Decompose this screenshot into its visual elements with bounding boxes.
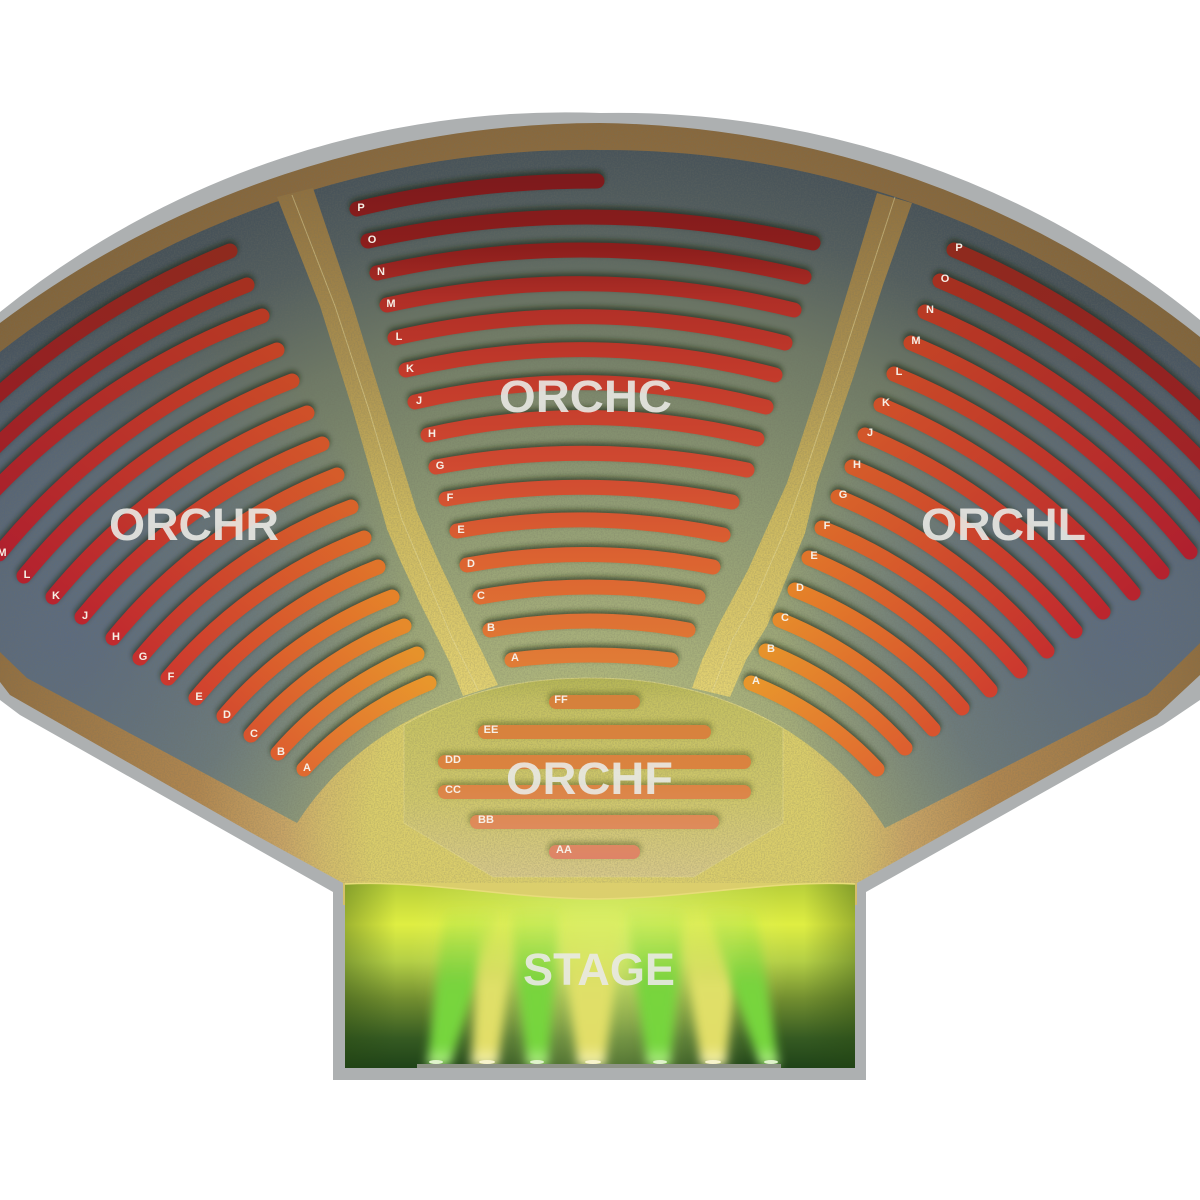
row FF: FF: [554, 694, 568, 706]
row L: L: [396, 331, 403, 343]
row L: L: [24, 569, 31, 581]
row AA: AA: [556, 844, 572, 856]
row H: H: [853, 459, 861, 471]
row O: [940, 273, 1200, 513]
row AA: [548, 842, 641, 859]
row L: [894, 366, 1162, 572]
row B: [277, 654, 417, 758]
row D: D: [796, 582, 804, 594]
panel: orchestra center rows: [357, 181, 813, 664]
row DD: [437, 752, 752, 769]
row G: G: [839, 489, 847, 501]
row P: [954, 242, 1200, 493]
row G: G: [139, 651, 147, 663]
row J: J: [416, 395, 422, 407]
panel: orchestra front rows: [437, 692, 752, 859]
row CC: CC: [445, 784, 461, 796]
row EE: [477, 722, 712, 739]
panel: orchestra left-hand rows: [751, 242, 1200, 769]
row K: K: [882, 397, 890, 409]
section label ORCHR: ORCHR: [109, 499, 279, 550]
row D: [467, 554, 713, 570]
row H: [852, 459, 1075, 631]
row K: K: [406, 363, 414, 375]
row B: B: [487, 622, 495, 634]
row F: [822, 520, 1020, 671]
row K: [406, 350, 775, 375]
row F: F: [168, 671, 175, 683]
row G: [139, 507, 351, 663]
row N: N: [377, 266, 385, 278]
row H: H: [428, 428, 436, 440]
row A: [751, 675, 877, 769]
row EE: EE: [484, 724, 498, 736]
row L: L: [896, 366, 903, 378]
row B: B: [277, 746, 285, 758]
row K: K: [52, 590, 60, 602]
row A: A: [303, 762, 311, 774]
row M: M: [911, 335, 921, 347]
row P: P: [357, 202, 365, 214]
panel: front orchestra platform: [404, 678, 783, 877]
row B: B: [767, 643, 775, 655]
row F: F: [824, 520, 831, 532]
stage front lip: [417, 1064, 781, 1068]
row H: [112, 475, 337, 643]
row D: D: [223, 709, 231, 721]
row DD: DD: [445, 754, 461, 766]
row G: G: [436, 460, 444, 472]
section label ORCHC: ORCHC: [499, 371, 672, 422]
row BB: [469, 812, 720, 829]
row FF: [548, 692, 641, 709]
row M: [911, 335, 1190, 552]
row C: [780, 612, 933, 729]
row O: O: [941, 273, 950, 285]
row F: [446, 487, 732, 504]
row K: [52, 413, 307, 602]
row D: [223, 597, 392, 721]
row G: [838, 489, 1047, 651]
row E: E: [457, 524, 465, 536]
row N: [925, 304, 1200, 533]
row H: [428, 417, 757, 440]
panel: seating floor: [0, 150, 1200, 828]
row J: [415, 383, 766, 407]
row M: [386, 284, 794, 310]
section label ORCHF: ORCHF: [506, 753, 673, 804]
row B: [487, 621, 688, 634]
row F: F: [447, 492, 454, 504]
row M: M: [386, 298, 396, 310]
row D: [795, 582, 962, 708]
row N: [0, 316, 262, 517]
row M: [0, 350, 277, 559]
panel: stage: [345, 883, 855, 1068]
row A: [303, 683, 429, 774]
row L: [24, 381, 292, 581]
floor grain texture: [0, 123, 1200, 883]
row A: A: [511, 652, 519, 664]
row P: [357, 181, 597, 214]
left aisle: [277, 188, 498, 696]
row E: [457, 520, 723, 536]
row N: [377, 250, 804, 278]
row A: A: [752, 675, 760, 687]
brown floor band: [0, 123, 1200, 905]
row B: [766, 643, 905, 748]
icon: stage spotlights: [427, 905, 779, 1066]
row J: J: [867, 427, 873, 439]
row J: [82, 444, 322, 622]
row C: C: [250, 728, 258, 740]
row A: [511, 652, 671, 664]
row C: [477, 587, 698, 602]
row E: [809, 550, 990, 690]
row J: [865, 427, 1103, 612]
row D: D: [467, 558, 475, 570]
row BB: BB: [478, 814, 494, 826]
row F: [168, 538, 364, 683]
row E: E: [810, 550, 818, 562]
row O: O: [368, 234, 377, 246]
panel: orchestra right-hand rows: [0, 251, 429, 774]
row P: [0, 251, 230, 421]
row E: [195, 567, 378, 703]
row H: H: [112, 631, 120, 643]
row P: P: [955, 242, 963, 254]
row CC: [437, 782, 752, 799]
seat row shadows: [0, 178, 1200, 766]
row J: J: [82, 610, 88, 622]
row C: C: [477, 590, 485, 602]
row O: [0, 285, 247, 473]
row N: N: [926, 304, 934, 316]
row E: E: [195, 691, 203, 703]
row K: [881, 397, 1133, 593]
right aisle: [692, 193, 912, 697]
row C: C: [781, 612, 789, 624]
section label ORCHL: ORCHL: [921, 499, 1086, 550]
row G: [436, 453, 747, 472]
row L: [395, 317, 785, 343]
row C: [250, 626, 404, 740]
row O: [368, 217, 813, 246]
section label STAGE: STAGE: [523, 944, 675, 995]
